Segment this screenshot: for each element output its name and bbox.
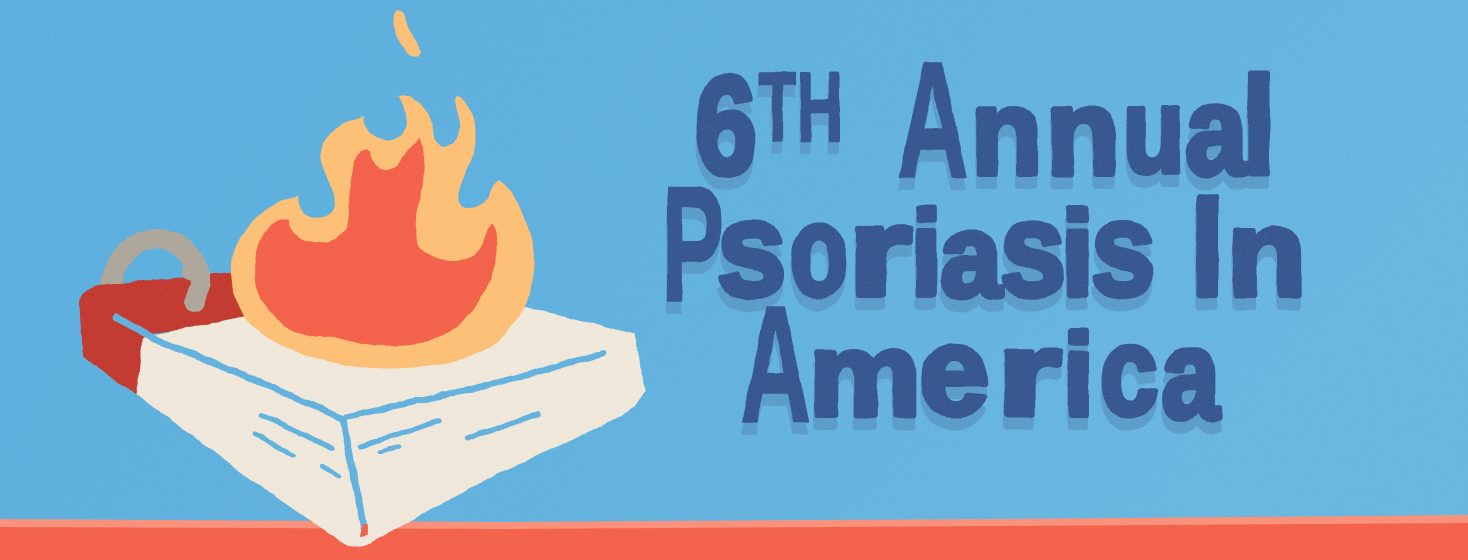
floor band bbox=[0, 515, 1468, 560]
outer flame bbox=[231, 95, 535, 369]
title line 2: n bbox=[1227, 185, 1306, 321]
title bbox=[662, 28, 1306, 456]
title line 2 bbox=[662, 152, 1306, 336]
red page corner mark bbox=[360, 523, 367, 536]
title line 3: A bbox=[740, 272, 811, 456]
title line 1: A bbox=[897, 28, 969, 212]
title line 2: s bbox=[1000, 175, 1066, 324]
ring front end bbox=[192, 269, 200, 304]
title line 3: c bbox=[1100, 303, 1158, 441]
title line 2: i bbox=[911, 187, 942, 321]
title line 3: a bbox=[1161, 304, 1221, 445]
calendar red back cover bbox=[80, 271, 246, 396]
illustration: burning calendar bbox=[80, 10, 646, 546]
spark bbox=[393, 10, 422, 57]
title line 2: r bbox=[848, 181, 912, 322]
title line 1: l bbox=[1242, 50, 1276, 204]
title line 1: n bbox=[1046, 64, 1120, 200]
blue page edges bbox=[117, 317, 603, 529]
title line 1 bbox=[695, 28, 1276, 212]
title line 3: e bbox=[919, 303, 989, 441]
title line 2: P bbox=[662, 152, 724, 336]
title line 1: u bbox=[1123, 64, 1184, 198]
title line 2: a bbox=[940, 189, 1003, 323]
title line 1: a bbox=[1185, 60, 1248, 201]
title line 1: n bbox=[971, 64, 1042, 200]
title line 2: I bbox=[1191, 167, 1224, 326]
title line 3 bbox=[740, 272, 1221, 456]
title line 2: s bbox=[1091, 175, 1155, 324]
title line 3: i bbox=[1063, 310, 1094, 440]
title line 1: 6 bbox=[695, 47, 757, 204]
title line 1: T bbox=[759, 52, 796, 162]
calendar pages bbox=[137, 307, 646, 546]
title line 2: i bbox=[1061, 187, 1094, 321]
title line 3: m bbox=[809, 309, 921, 441]
title line 1: H bbox=[797, 52, 843, 162]
title line 3: r bbox=[997, 307, 1061, 441]
calendar ring bbox=[110, 239, 200, 302]
inner flame bbox=[255, 137, 497, 346]
title line 2: o bbox=[790, 180, 848, 323]
title line 2: s bbox=[717, 175, 787, 324]
